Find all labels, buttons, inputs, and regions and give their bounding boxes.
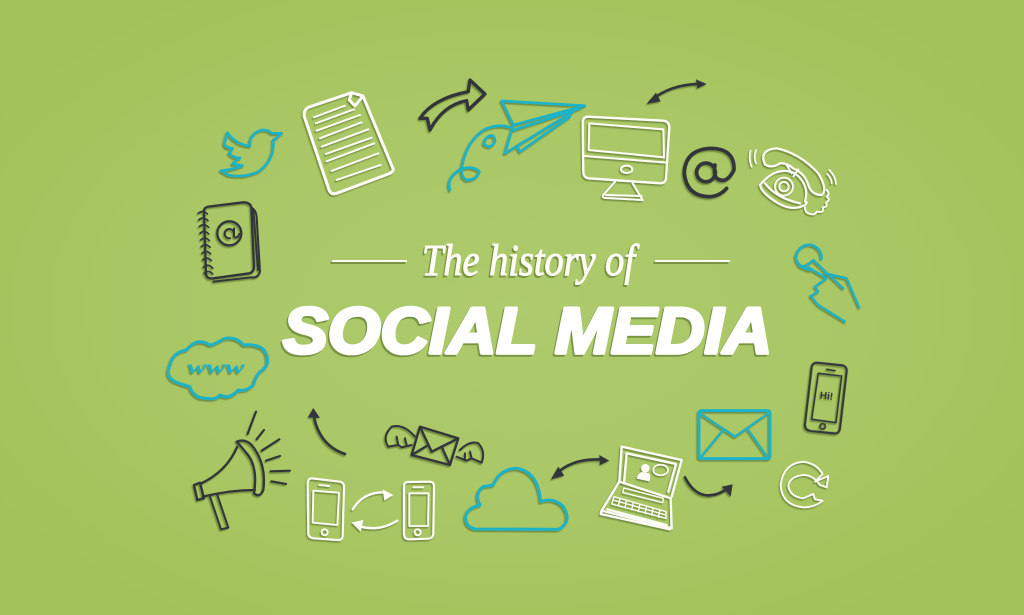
icon: curved arrow: [420, 80, 485, 130]
icon: arrow to envelope: [685, 477, 733, 497]
icon: megaphone: [194, 412, 290, 529]
icon: refresh: [781, 462, 828, 507]
icon: cloud: [466, 468, 567, 529]
icon: www cloud: www: [187, 357, 245, 378]
icon: smartphone Hi: Hi!: [819, 391, 834, 403]
icon: double arrow bottom: [551, 455, 609, 479]
heading: Social Media: SOCIAL MEDIA: [283, 294, 772, 367]
icon: document: [304, 93, 393, 194]
icon: syncing phones: [308, 478, 434, 540]
icon: paper plane with curl: [449, 101, 585, 190]
icon: teal envelope: [699, 411, 770, 459]
heading: The history of: The history of: [422, 236, 640, 285]
icon: rotary telephone: [750, 148, 836, 214]
icon: notebook: [198, 202, 260, 282]
icon: laptop: [601, 447, 682, 529]
icon: desktop monitor: [583, 117, 669, 200]
icon: twitter bird: [221, 130, 282, 176]
icon: tapping finger: [796, 245, 859, 322]
icon: winged envelope: [386, 426, 483, 465]
icon: www cloud: [168, 338, 267, 399]
icon: up arrow: [308, 408, 345, 454]
icon: smartphone Hi: [805, 363, 847, 433]
icon: double arrow top: [647, 79, 707, 104]
icon: at sign: [684, 148, 734, 197]
